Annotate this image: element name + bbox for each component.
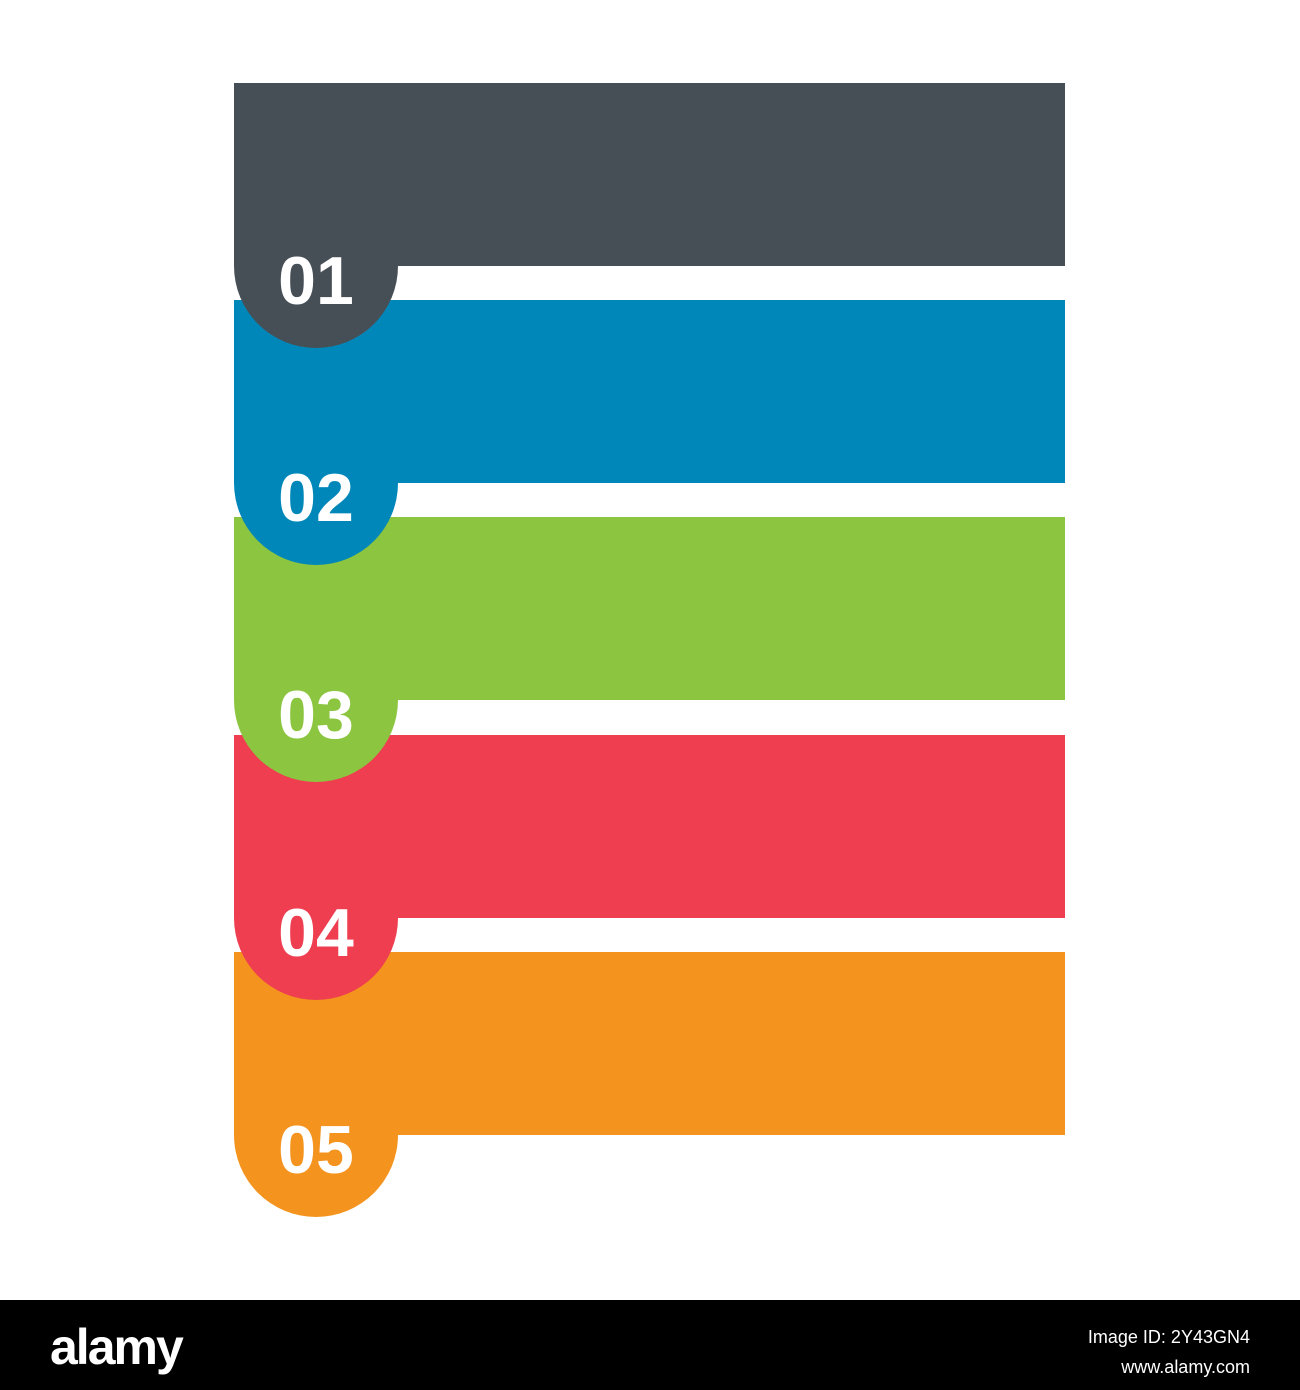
tab 01: 01 (278, 243, 354, 319)
tab 03: 03 (278, 677, 354, 753)
tab 04 (234, 735, 398, 1000)
footer info: Image ID: 2Y43GN4 (1088, 1327, 1250, 1347)
footer (0, 1300, 1300, 1390)
tab 04: 04 (278, 895, 354, 971)
tab 01 (234, 83, 398, 348)
bar 02 (234, 300, 1065, 483)
footer info: www.alamy.com (1121, 1357, 1250, 1377)
bar 04 (234, 735, 1065, 918)
tab 05: 05 (278, 1112, 354, 1188)
tab 02 (234, 300, 398, 565)
tab 02: 02 (278, 460, 354, 536)
tab 03 (234, 517, 398, 782)
footer logo: alamy (50, 1319, 182, 1375)
tab 05 (234, 952, 398, 1217)
bar 05 (234, 952, 1065, 1135)
bar 01 (234, 83, 1065, 266)
bar 03 (234, 517, 1065, 700)
footer info (1088, 1327, 1250, 1377)
